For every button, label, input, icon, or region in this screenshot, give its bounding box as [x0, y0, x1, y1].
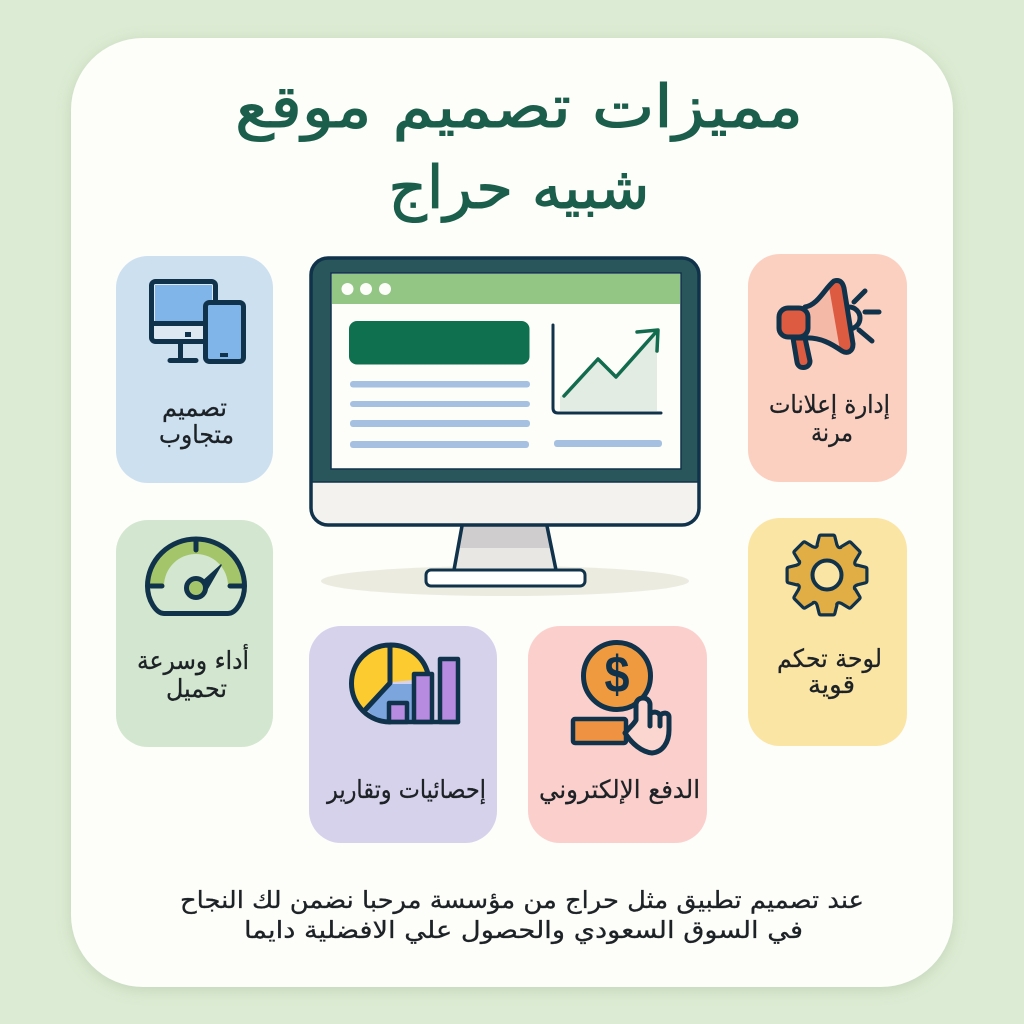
title: شبيه حراج [388, 153, 650, 223]
label: مرنة [811, 418, 853, 447]
card: statistics and reports [309, 626, 497, 843]
card: responsive design [116, 256, 273, 483]
illustration: desktop monitor [311, 258, 699, 596]
footer text: في السوق السعودي والحصول علي الافضلية دايما [244, 916, 803, 944]
icon: megaphone [779, 281, 879, 368]
title [235, 72, 803, 223]
icon: speedometer [148, 538, 244, 614]
label [159, 393, 234, 450]
label: متجاوب [159, 420, 234, 450]
label [769, 390, 890, 447]
label [777, 644, 882, 699]
icon: coin and hand [573, 642, 669, 753]
label: لوحة تحكم [777, 644, 882, 674]
card: flexible ad management [748, 254, 907, 482]
icon: coin and hand: $ [604, 646, 630, 704]
footer text: عند تصميم تطبيق مثل حراج من مؤسسة مرحبا نضمن لك النجاح [180, 886, 864, 914]
label: تحميل [166, 674, 227, 703]
label: إدارة إعلانات [769, 390, 890, 420]
icon: pie and bar chart [352, 645, 458, 722]
card: electronic payment [528, 626, 707, 843]
label: أداء وسرعة [137, 643, 249, 676]
footer text [180, 886, 864, 944]
label: قوية [808, 670, 855, 699]
icon: gear [789, 537, 865, 613]
card: powerful control panel [748, 518, 907, 746]
label: إحصائيات وتقارير [325, 775, 486, 805]
panel: main card [71, 38, 953, 987]
label [137, 643, 249, 703]
label: الدفع الإلكتروني [539, 775, 700, 805]
label: تصميم [162, 393, 227, 423]
card: performance and load speed [116, 520, 273, 747]
title: مميزات تصميم موقع [235, 72, 803, 142]
icon: desktop and tablet [151, 282, 244, 362]
